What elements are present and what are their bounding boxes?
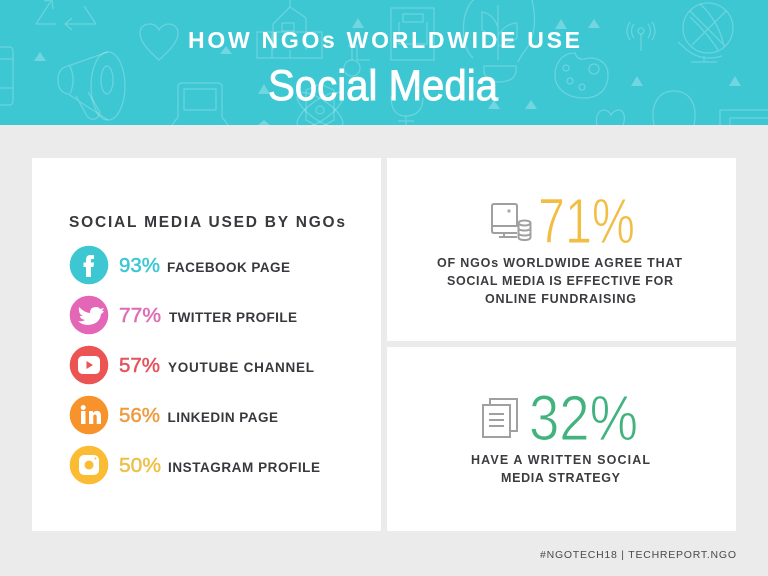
row: youtube: 57% bbox=[119, 355, 160, 377]
row: facebook: FACEBOOK PAGE bbox=[167, 260, 290, 275]
row: instagram bbox=[70, 446, 320, 484]
row: linkedin bbox=[70, 396, 278, 434]
icon: palette bbox=[555, 53, 608, 98]
row: twitter: 77% bbox=[119, 305, 161, 327]
footer credit: #NGOTECH18 | TECHREPORT.NGO bbox=[540, 549, 736, 561]
title line: HOW NGOs WORLDWIDE USE bbox=[188, 27, 580, 53]
icon: youtube bbox=[70, 346, 108, 384]
icon: recycling arrows bbox=[36, 0, 96, 30]
icon: small heart bbox=[596, 110, 624, 125]
icon: computer and coins bbox=[492, 204, 530, 240]
panel: 32% stat bbox=[387, 347, 736, 531]
icon: twitter bbox=[70, 296, 108, 334]
panel: 71% stat bbox=[387, 158, 736, 341]
panel heading: SOCIAL MEDIA USED BY NGOs bbox=[69, 214, 345, 231]
icon: balloon circle bbox=[653, 91, 695, 125]
row: twitter bbox=[70, 296, 297, 334]
icon: facebook bbox=[70, 246, 108, 284]
header banner bbox=[0, 0, 768, 134]
icon: instagram bbox=[70, 446, 108, 484]
icon: atom bbox=[292, 84, 348, 134]
icon: laptop bbox=[172, 83, 228, 125]
stat description: ONLINE FUNDRAISING bbox=[485, 292, 636, 306]
icon: antenna bbox=[627, 22, 655, 51]
icon: wine glass bbox=[391, 96, 423, 125]
icon: picture box bbox=[720, 110, 768, 125]
stat description bbox=[471, 453, 650, 485]
row: facebook: 93% bbox=[119, 255, 160, 277]
icon: wheelchair bbox=[344, 46, 372, 85]
panel: social media used by NGOs bbox=[32, 158, 381, 531]
row: youtube: YOUTUBE CHANNEL bbox=[168, 360, 314, 375]
stat: 71%: 71% bbox=[538, 185, 635, 257]
row: linkedin: 56% bbox=[119, 405, 160, 427]
icon: megaphone bbox=[58, 52, 125, 120]
stat description: MEDIA STRATEGY bbox=[501, 471, 621, 485]
stat description: HAVE A WRITTEN SOCIAL bbox=[471, 453, 650, 467]
icon: phone bbox=[0, 47, 13, 105]
row: youtube bbox=[70, 346, 314, 384]
stat description: SOCIAL MEDIA IS EFFECTIVE FOR bbox=[447, 274, 673, 288]
row: instagram: 50% bbox=[119, 455, 161, 477]
icon: globe bbox=[678, 3, 733, 62]
stat: 32%: 32% bbox=[529, 382, 638, 454]
stat description: OF NGOs WORLDWIDE AGREE THAT bbox=[437, 256, 682, 270]
row: facebook bbox=[70, 246, 290, 284]
title: Social Media: Social Media bbox=[268, 62, 498, 110]
icon: clipboard bbox=[391, 8, 434, 60]
stat description bbox=[437, 256, 682, 306]
icon: lightbulb bbox=[463, 0, 535, 82]
decorative triangles bbox=[34, 18, 741, 125]
row: linkedin: LINKEDIN PAGE bbox=[168, 410, 278, 425]
row: instagram: INSTAGRAM PROFILE bbox=[168, 460, 320, 475]
icon: documents bbox=[483, 399, 517, 437]
icon: house bbox=[257, 0, 322, 58]
icon: linkedin bbox=[70, 396, 108, 434]
row: twitter: TWITTER PROFILE bbox=[169, 310, 297, 325]
icon: heart bbox=[140, 24, 178, 60]
